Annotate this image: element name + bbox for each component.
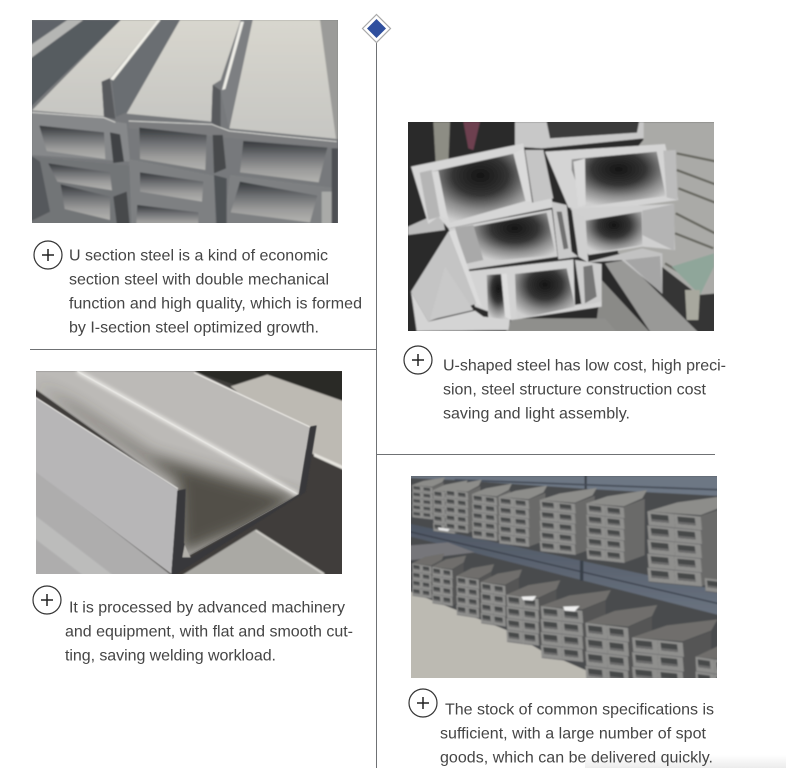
text block: U section steel intro: section steel with double mechanical bbox=[69, 272, 329, 288]
text block: U section steel intro: by I-section steel optimized growth. bbox=[69, 320, 319, 336]
text block: processing and cutting: and equipment, with flat and smooth cut- bbox=[65, 624, 353, 640]
text block: U section steel intro: U section steel is a kind of economic bbox=[69, 248, 328, 264]
text block: U section steel intro bbox=[34, 241, 362, 336]
icon: plus circle bbox=[409, 689, 437, 717]
text block: U section steel intro: function and high quality, which is formed bbox=[69, 296, 362, 312]
center vertical timeline line bbox=[376, 42, 378, 768]
text block: U-shaped steel advantages: U-shaped steel has low cost, high preci- bbox=[443, 358, 726, 374]
photo: stacked U channels top view bbox=[32, 20, 338, 223]
bottom-right shadow fade bbox=[585, 755, 786, 768]
text block: U-shaped steel advantages bbox=[404, 346, 726, 422]
text block: stock of common specifications bbox=[409, 689, 714, 766]
text block: U-shaped steel advantages: saving and light assembly. bbox=[443, 406, 630, 422]
text block: stock of common specifications: sufficient, with a large number of spot bbox=[440, 726, 707, 742]
text block: U-shaped steel advantages: sion, steel structure construction cost bbox=[443, 382, 707, 398]
text block: processing and cutting bbox=[33, 586, 353, 664]
divider: right panel bbox=[377, 454, 715, 456]
icon: plus circle bbox=[34, 241, 62, 269]
text block: stock of common specifications: goods, which can be delivered quickly. bbox=[440, 750, 713, 766]
text block: processing and cutting: ting, saving welding workload. bbox=[65, 648, 276, 664]
icon: blue diamond marker bbox=[362, 14, 390, 42]
photo: pile of white U channels bbox=[408, 122, 714, 331]
icon: plus circle bbox=[33, 586, 61, 614]
text block: processing and cutting: It is processed by advanced machinery bbox=[69, 600, 345, 616]
icon: plus circle bbox=[404, 346, 432, 374]
divider: left panel bbox=[30, 348, 377, 350]
photo: warehouse racks of U channels bbox=[411, 476, 717, 678]
photo: single U channel close-up bbox=[36, 371, 342, 574]
text block: stock of common specifications: The stock of common specifications is bbox=[445, 702, 714, 718]
